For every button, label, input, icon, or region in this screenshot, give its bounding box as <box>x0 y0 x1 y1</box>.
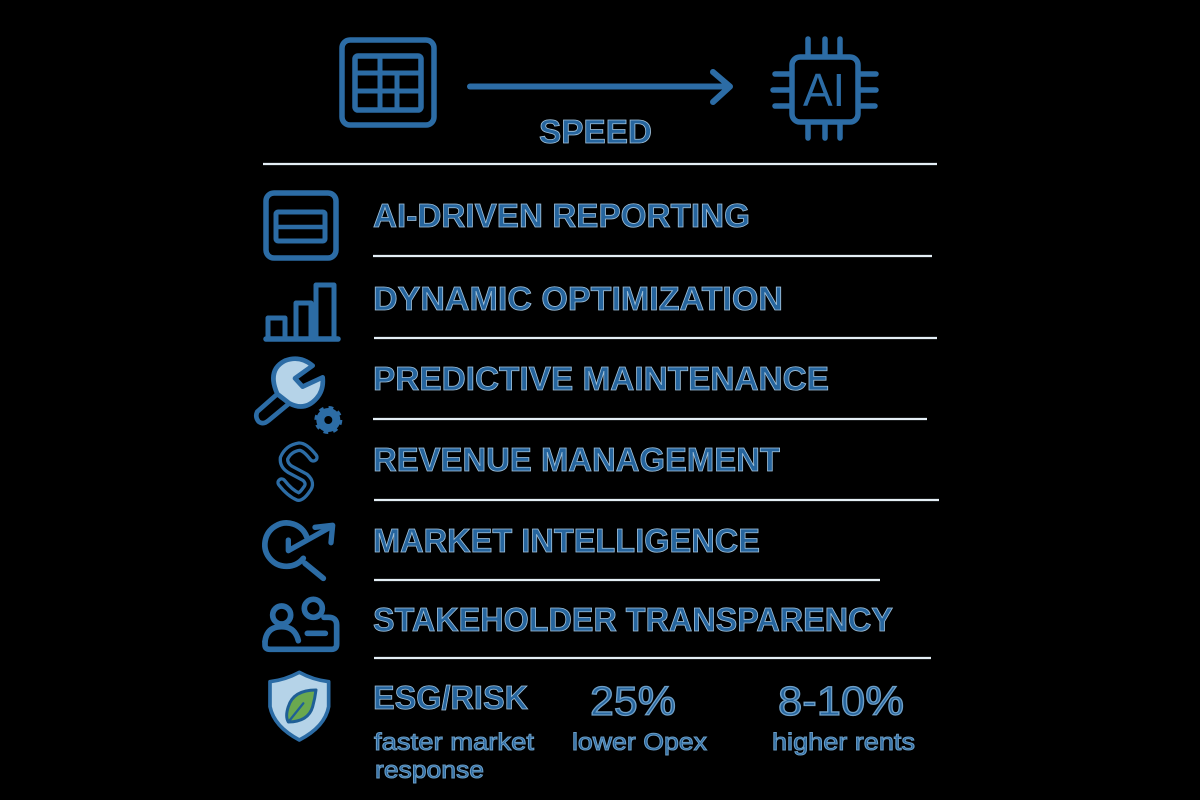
stat: 8-10% higher rents: 8-10% <box>778 678 904 724</box>
label: speed: SPEED <box>539 113 652 150</box>
arrow: spreadsheet to AI <box>470 72 730 102</box>
icon: bar chart <box>266 285 338 339</box>
icon: dollar S <box>282 447 313 497</box>
text: faster market response <box>374 729 534 784</box>
stat: 25% lower Opex: lower Opex <box>572 729 707 756</box>
icon: spreadsheet table <box>342 40 434 125</box>
icon: report panel <box>266 193 336 258</box>
heading: stakeholder transparency: STAKEHOLDER TRANSPARENCY <box>373 601 893 638</box>
divider lines <box>263 164 939 658</box>
text: faster market response: response <box>375 757 484 784</box>
stat: 8-10% higher rents <box>772 678 915 756</box>
icon: wrench and gear <box>256 359 341 432</box>
text: faster market response: faster market <box>374 729 534 756</box>
heading: market intelligence: MARKET INTELLIGENCE <box>373 522 760 559</box>
heading: ESG/risk: ESG/RISK <box>373 679 528 716</box>
stat: 8-10% higher rents: higher rents <box>772 729 915 756</box>
heading: dynamic optimization: DYNAMIC OPTIMIZATION <box>373 280 783 317</box>
icon: AI chip <box>773 39 876 138</box>
stat: 25% lower Opex <box>572 678 707 756</box>
icon: stakeholders <box>265 599 337 649</box>
icon: AI chip: AI <box>803 64 845 116</box>
heading: predictive maintenance: PREDICTIVE MAINTENANCE <box>373 360 829 397</box>
stat: 25% lower Opex: 25% <box>590 678 676 724</box>
heading: revenue management: REVENUE MANAGEMENT <box>373 441 780 478</box>
icon: ESG shield with leaf <box>270 672 329 740</box>
icon: market magnifier with arrow <box>265 523 333 578</box>
heading: AI-driven reporting: AI-DRIVEN REPORTING <box>373 197 750 234</box>
